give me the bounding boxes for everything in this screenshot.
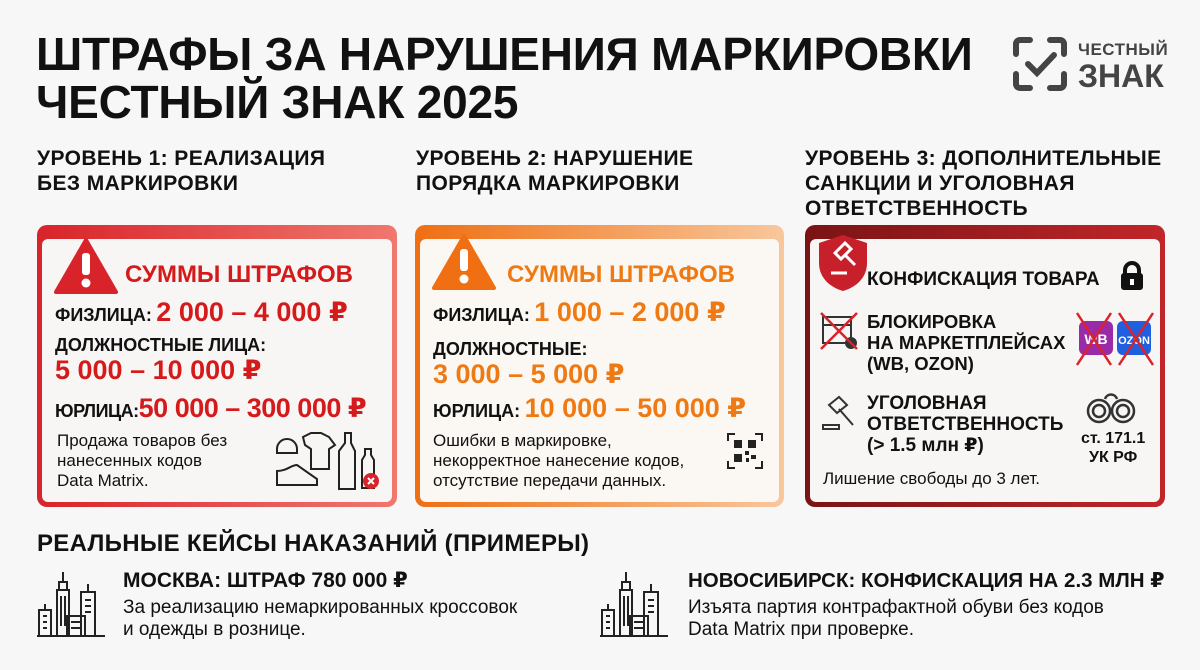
case text: Изъята партия контрафактной обуви без кодов [688,597,1104,618]
item: criminal [867,393,1063,456]
panel: level 1: ЮРЛИЦА:50 000 – 300 000 ₽ [55,393,366,423]
icon: gavel [822,396,854,430]
title: ЧЕСТНЫЙ ЗНАК 2025 [36,76,518,128]
description: Data Matrix. [57,471,149,490]
panel: level 3 [805,225,1165,507]
logo: ЗНАК [1078,58,1164,94]
case text [123,597,518,640]
heading level 1: БЕЗ МАРКИРОВКИ [37,172,238,195]
icon: city [600,572,668,637]
description: Ошибки в маркировке, [433,431,612,450]
description: Лишение свободы до 3 лет. [823,469,1040,488]
case text: и одежды в рознице. [123,619,306,640]
heading level 3: УРОВЕНЬ 3: ДОПОЛНИТЕЛЬНЫЕ [805,147,1162,170]
heading level 3: ОТВЕТСТВЕННОСТЬ [805,197,1028,220]
icon: qr code [727,433,763,469]
icon: WB OZON crossed: WB [1084,331,1108,347]
logo [1013,37,1168,94]
icon: WB OZON crossed [1076,312,1154,366]
case text: За реализацию немаркированных кроссовок [123,597,517,618]
subheading: СУММЫ ШТРАФОВ [125,261,353,288]
description: отсутствие передачи данных. [433,471,666,490]
title [36,28,973,128]
item: criminal: ОТВЕТСТВЕННОСТЬ [867,414,1063,435]
heading level 2: ПОРЯДКА МАРКИРОВКИ [416,172,680,195]
panel: level 2: 3 000 – 5 000 ₽ [433,359,624,389]
case text: Data Matrix при проверке. [688,619,914,640]
item: marketplace block [867,311,1066,374]
item: marketplace block: (WB, OZON) [867,353,974,374]
heading level 2 [416,147,693,195]
case: Novosibirsk [600,569,1164,640]
panel: level 1: ФИЗЛИЦА: 2 000 – 4 000 ₽ [55,297,348,327]
panel: level 2: ЮРЛИЦА: 10 000 – 50 000 ₽ [433,393,746,423]
article reference: ст. 171.1 [1081,430,1145,447]
icon: goods [276,432,379,490]
description: нанесенных кодов [57,451,202,470]
description [57,431,227,490]
subheading: СУММЫ ШТРАФОВ [507,261,735,288]
description: Продажа товаров без [57,431,227,450]
panel: level 1 [37,225,397,507]
icon: blocked store [820,312,858,350]
item: criminal: (> 1.5 млн ₽) [867,435,984,456]
article reference [1081,430,1145,466]
heading: cases: РЕАЛЬНЫЕ КЕЙСЫ НАКАЗАНИЙ (ПРИМЕРЫ) [37,530,589,557]
icon: WB OZON crossed: OZON [1118,335,1150,347]
case title: МОСКВА: ШТРАФ 780 000 ₽ [123,569,408,592]
heading level 2: УРОВЕНЬ 2: НАРУШЕНИЕ [416,147,693,170]
item: marketplace block: БЛОКИРОВКА [867,311,996,332]
case: Moscow [37,569,518,640]
heading level 3 [805,147,1162,220]
icon: shield gavel [819,235,867,291]
description: некорректное нанесение кодов, [433,451,684,470]
case title: НОВОСИБИРСК: КОНФИСКАЦИЯ НА 2.3 МЛН ₽ [688,569,1164,592]
description [433,431,684,490]
fines list [55,297,366,423]
item: criminal: УГОЛОВНАЯ [867,393,987,414]
title: ШТРАФЫ ЗА НАРУШЕНИЯ МАРКИРОВКИ [36,28,973,80]
panel: level 2: ФИЗЛИЦА: 1 000 – 2 000 ₽ [433,297,726,327]
heading level 1: УРОВЕНЬ 1: РЕАЛИЗАЦИЯ [37,147,325,170]
heading level 1 [37,147,325,195]
icon: warning [432,234,496,290]
fines list [433,297,746,423]
case text [688,597,1104,640]
icon: lock [1121,261,1143,290]
icon: warning [54,238,118,294]
icon: city [37,572,105,637]
article reference: УК РФ [1089,449,1137,466]
item: confiscation: КОНФИСКАЦИЯ ТОВАРА [867,269,1100,290]
item: marketplace block: НА МАРКЕТПЛЕЙСАХ [867,332,1065,353]
panel: level 2 [415,225,784,507]
panel: level 1: ДОЛЖНОСТНЫЕ ЛИЦА: [55,335,266,355]
panel: level 2: ДОЛЖНОСТНЫЕ: [433,339,587,359]
icon: handcuffs [1086,393,1136,424]
logo: ЧЕСТНЫЙ [1078,40,1168,59]
heading level 3: САНКЦИИ И УГОЛОВНАЯ [805,172,1075,195]
panel: level 1: 5 000 – 10 000 ₽ [55,355,261,385]
